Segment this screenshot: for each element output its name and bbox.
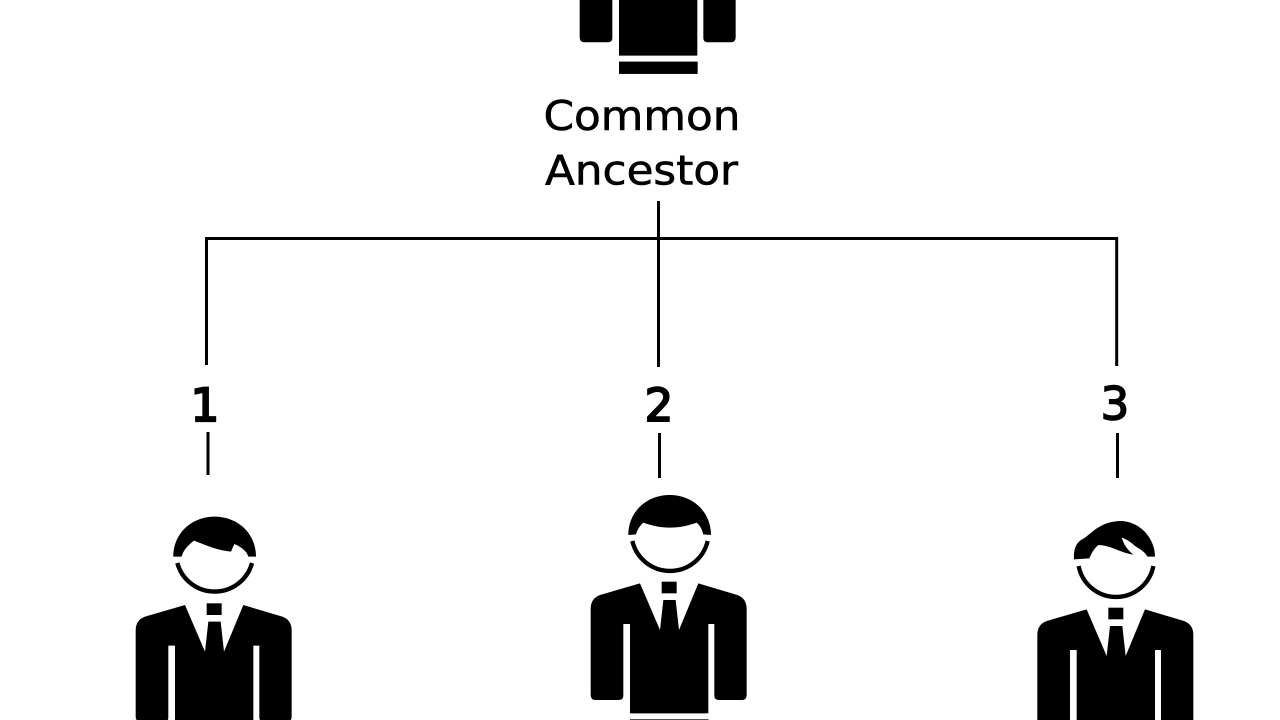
number 3: 3 [1101,378,1129,430]
label: Common Ancestor: Common [544,92,740,140]
label: Common Ancestor [544,92,740,194]
number 1: 1 [191,379,219,432]
icon: descendant person 2 [591,495,747,720]
icon: common ancestor figure [580,0,736,74]
number 2: 2 [645,379,673,432]
icon: descendant person 1 [136,517,292,720]
label: Common Ancestor: Ancestor [545,146,738,194]
icon: descendant person 3 [1037,521,1193,720]
tree connector lines [206,201,1118,478]
